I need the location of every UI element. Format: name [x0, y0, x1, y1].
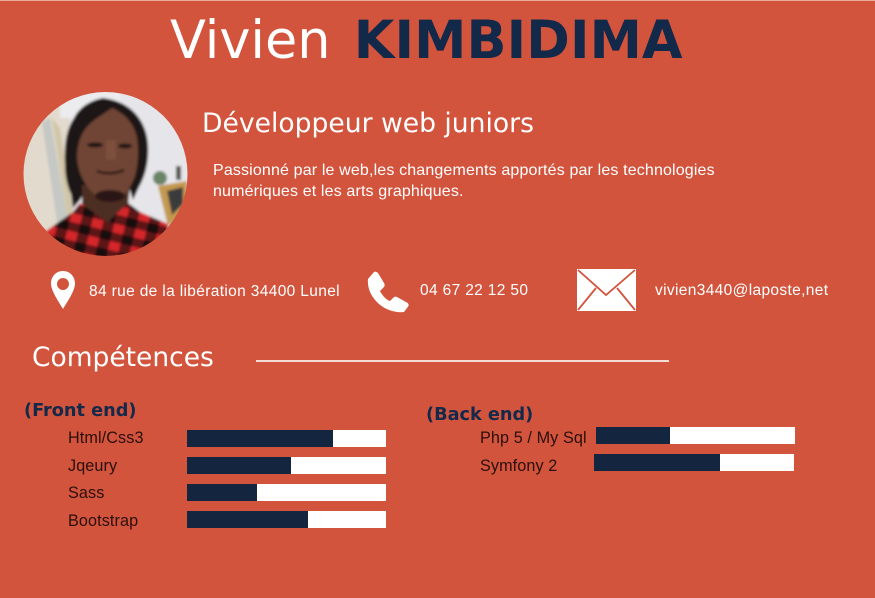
- portrait photo: [24, 92, 188, 256]
- shirt: [46, 203, 170, 262]
- bar: sass: [187, 484, 386, 501]
- section heading: skills: Compétences: [32, 342, 214, 373]
- intro text: numériques et les arts graphiques.: [213, 183, 464, 200]
- heading rule: [256, 360, 669, 362]
- address: 84 rue de la libération 34400 Lunel: [89, 283, 340, 300]
- bar: jquery: [187, 457, 386, 474]
- intro text: Passionné par le web,les changements apportés par les technologies: [213, 162, 715, 179]
- back end heading: (Back end): [426, 405, 533, 425]
- job title: Développeur web juniors: [202, 108, 534, 139]
- bar: symfony: [594, 454, 794, 471]
- phone number: 04 67 22 12 50: [420, 282, 528, 299]
- label: symfony: Symfony 2: [480, 457, 557, 475]
- label: html/css: Html/Css3: [68, 429, 144, 447]
- panel: front end skills: [24, 401, 386, 530]
- panel: back end skills: [426, 405, 795, 475]
- front end heading: (Front end): [24, 401, 136, 421]
- email: vivien3440@laposte,net: [655, 282, 828, 299]
- title: Vivien KIMBIDIMA: [170, 10, 683, 71]
- label: bootstrap: Bootstrap: [68, 512, 138, 530]
- face: [77, 108, 138, 201]
- bar: bootstrap: [187, 511, 386, 528]
- bar: php: [596, 427, 795, 444]
- intro text: [213, 162, 715, 200]
- label: php: Php 5 / My Sql: [480, 429, 587, 447]
- hair: [65, 98, 148, 208]
- label: sass: Sass: [68, 484, 104, 502]
- neck: [82, 185, 130, 222]
- bar: html/css: [187, 430, 386, 447]
- label: jquery: Jqeury: [68, 457, 117, 475]
